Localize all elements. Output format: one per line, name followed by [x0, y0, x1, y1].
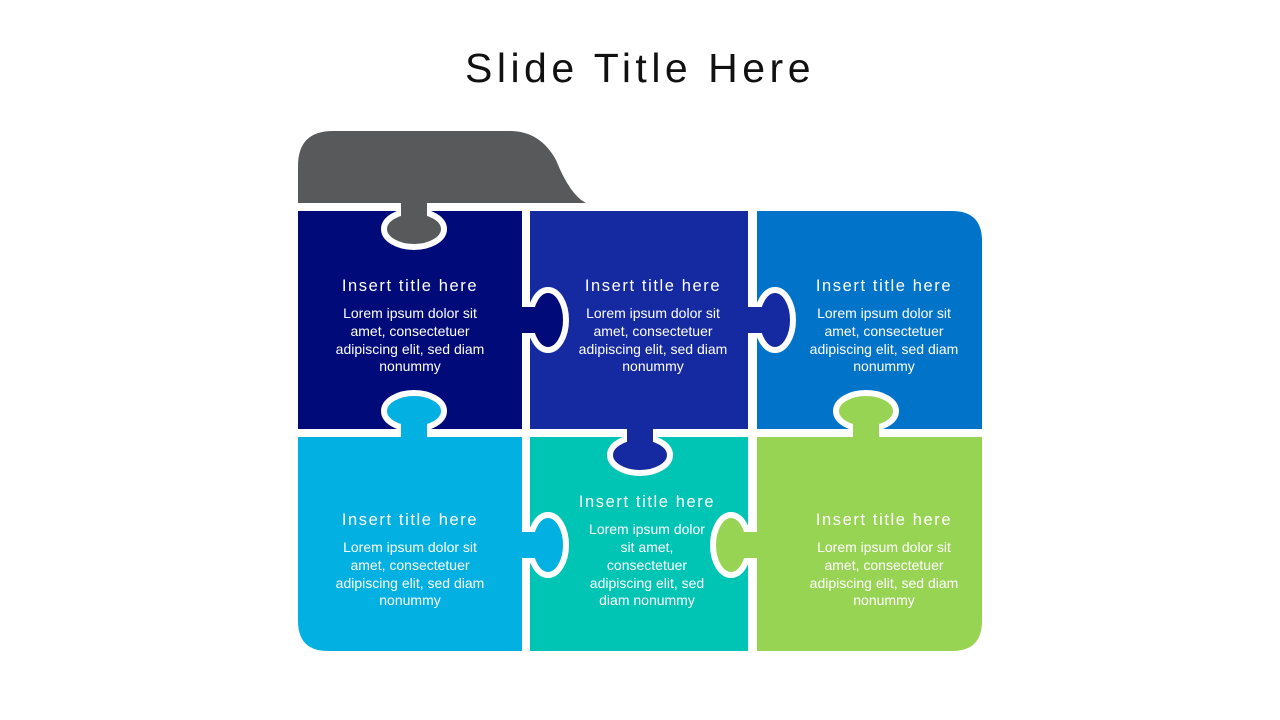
- piece 5 teal: [530, 437, 748, 651]
- text: piece 2: Lorem ipsum dolor sit: [586, 305, 720, 321]
- text: piece 5: diam nonummy: [599, 592, 695, 608]
- piece 4 light blue: [298, 437, 522, 651]
- piece 1 navy: [298, 211, 522, 429]
- text: piece 3: adipiscing elit, sed diam: [810, 341, 958, 357]
- text: piece 2: nonummy: [622, 358, 684, 374]
- knob: gray into piece 1: [384, 200, 444, 247]
- text: piece 5: Insert title here: [579, 493, 715, 511]
- text: piece 6: nonummy: [853, 592, 915, 608]
- title: Slide Title Here: [465, 45, 815, 91]
- piece 3 mid blue: [757, 211, 982, 429]
- text: piece 4: [336, 511, 484, 608]
- text: piece 6: adipiscing elit, sed diam: [810, 575, 958, 591]
- text: piece 4: Lorem ipsum dolor sit: [343, 539, 477, 555]
- text: piece 4: Insert title here: [342, 511, 478, 529]
- text: piece 1: Lorem ipsum dolor sit: [343, 305, 477, 321]
- piece 2 blue: [530, 211, 748, 429]
- knob: piece 4 into piece 5: [518, 515, 566, 575]
- text: piece 3: Insert title here: [816, 277, 952, 295]
- text: piece 1: Insert title here: [342, 277, 478, 295]
- text: piece 3: Lorem ipsum dolor sit: [817, 305, 951, 321]
- text: piece 2: amet, consectetuer: [593, 323, 713, 339]
- text: piece 5: consectetuer: [607, 557, 687, 573]
- text: piece 4: adipiscing elit, sed diam: [336, 575, 484, 591]
- text: piece 3: [810, 277, 958, 374]
- knob: piece 6 into piece 3: [836, 393, 896, 441]
- text: piece 5: adipiscing elit, sed: [590, 575, 704, 591]
- text: piece 2: Insert title here: [585, 277, 721, 295]
- knob: piece 4 into piece 1: [384, 393, 444, 441]
- text: piece 6: amet, consectetuer: [824, 557, 944, 573]
- folder tab: [298, 131, 586, 203]
- text: piece 4: amet, consectetuer: [350, 557, 470, 573]
- knob: piece 1 into piece 2: [518, 290, 566, 350]
- knob: piece 2 into piece 5: [610, 425, 670, 473]
- knob: piece 6 into piece 5: [713, 515, 762, 575]
- text: piece 3: amet, consectetuer: [824, 323, 944, 339]
- text: piece 2: adipiscing elit, sed diam: [579, 341, 727, 357]
- knob: piece 2 into piece 3: [745, 290, 793, 350]
- text: piece 3: nonummy: [853, 358, 915, 374]
- text: piece 1: amet, consectetuer: [350, 323, 470, 339]
- text: piece 6: Insert title here: [816, 511, 952, 529]
- text: piece 6: Lorem ipsum dolor sit: [817, 539, 951, 555]
- text: piece 1: nonummy: [379, 358, 441, 374]
- text: piece 1: adipiscing elit, sed diam: [336, 341, 484, 357]
- text: piece 6: [810, 511, 958, 608]
- text: piece 1: [336, 277, 484, 374]
- text: piece 2: [579, 277, 727, 374]
- piece 6 green: [757, 437, 982, 651]
- text: piece 4: nonummy: [379, 592, 441, 608]
- text: piece 5: sit amet,: [621, 539, 673, 555]
- text: piece 5: [579, 493, 715, 608]
- text: piece 5: Lorem ipsum dolor: [589, 521, 705, 537]
